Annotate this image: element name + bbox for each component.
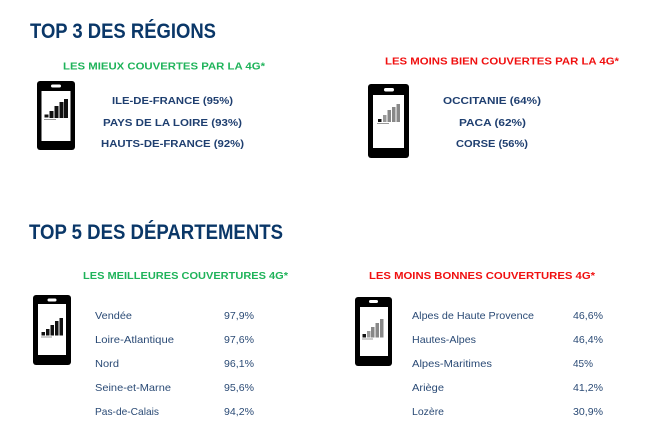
table: worst departments: Alpes de Haute Provence (412, 310, 534, 322)
table: best departments: Seine-et-Marne (95, 382, 171, 394)
list: least regions: CORSE (56%) (456, 138, 528, 150)
table: worst departments: Ariège (412, 382, 444, 394)
table: best departments: Pas-de-Calais (95, 406, 159, 418)
subheading: best covered regions: LES MIEUX COUVERTES PAR LA 4G* (63, 62, 265, 72)
table: worst departments: 46,4% (573, 334, 603, 346)
subheading: least covered regions: LES MOINS BIEN COUVERTES PAR LA 4G* (385, 56, 619, 68)
table: worst departments: 41,2% (573, 382, 603, 394)
list: least regions (443, 95, 541, 150)
list: best regions (101, 95, 244, 150)
table: worst departments: Alpes-Maritimes (412, 358, 492, 370)
table: worst departments: 30,9% (573, 406, 603, 418)
icon: phone worst departments (355, 297, 392, 366)
table: best departments: 95,6% (224, 382, 254, 394)
icon: phone least regions (368, 84, 409, 158)
table: best departments: Nord (95, 358, 119, 370)
subheading: worst departments: LES MOINS BONNES COUVERTURES 4G* (369, 271, 595, 282)
icon: phone best regions (37, 81, 75, 150)
table: worst departments: 46,6% (573, 310, 603, 322)
list: best regions: PAYS DE LA LOIRE (93%) (103, 117, 242, 129)
table: best departments: 97,6% (224, 334, 254, 346)
table: worst departments: Lozère (412, 406, 444, 418)
table: best departments: Loire-Atlantique (95, 334, 174, 346)
table: best departments: Vendée (95, 310, 132, 322)
subheading: best departments: LES MEILLEURES COUVERTURES 4G* (83, 271, 288, 282)
icon: phone best departments (33, 295, 71, 365)
list: best regions: HAUTS-DE-FRANCE (92%) (101, 138, 244, 150)
list: least regions: OCCITANIE (64%) (443, 95, 541, 107)
table: worst departments: Hautes-Alpes (412, 334, 476, 346)
table: best departments: 96,1% (224, 358, 254, 370)
table: worst departments: 45% (573, 358, 593, 370)
table: best departments: 94,2% (224, 406, 254, 418)
list: least regions: PACA (62%) (459, 117, 526, 129)
list: best regions: ILE-DE-FRANCE (95%) (112, 95, 233, 107)
table: worst departments (412, 310, 603, 418)
title: top 5 departments: TOP 5 DES DÉPARTEMENTS (29, 219, 283, 244)
title: top 3 regions: TOP 3 DES RÉGIONS (30, 18, 216, 43)
table: best departments: 97,9% (224, 310, 254, 322)
table: best departments (95, 310, 254, 418)
